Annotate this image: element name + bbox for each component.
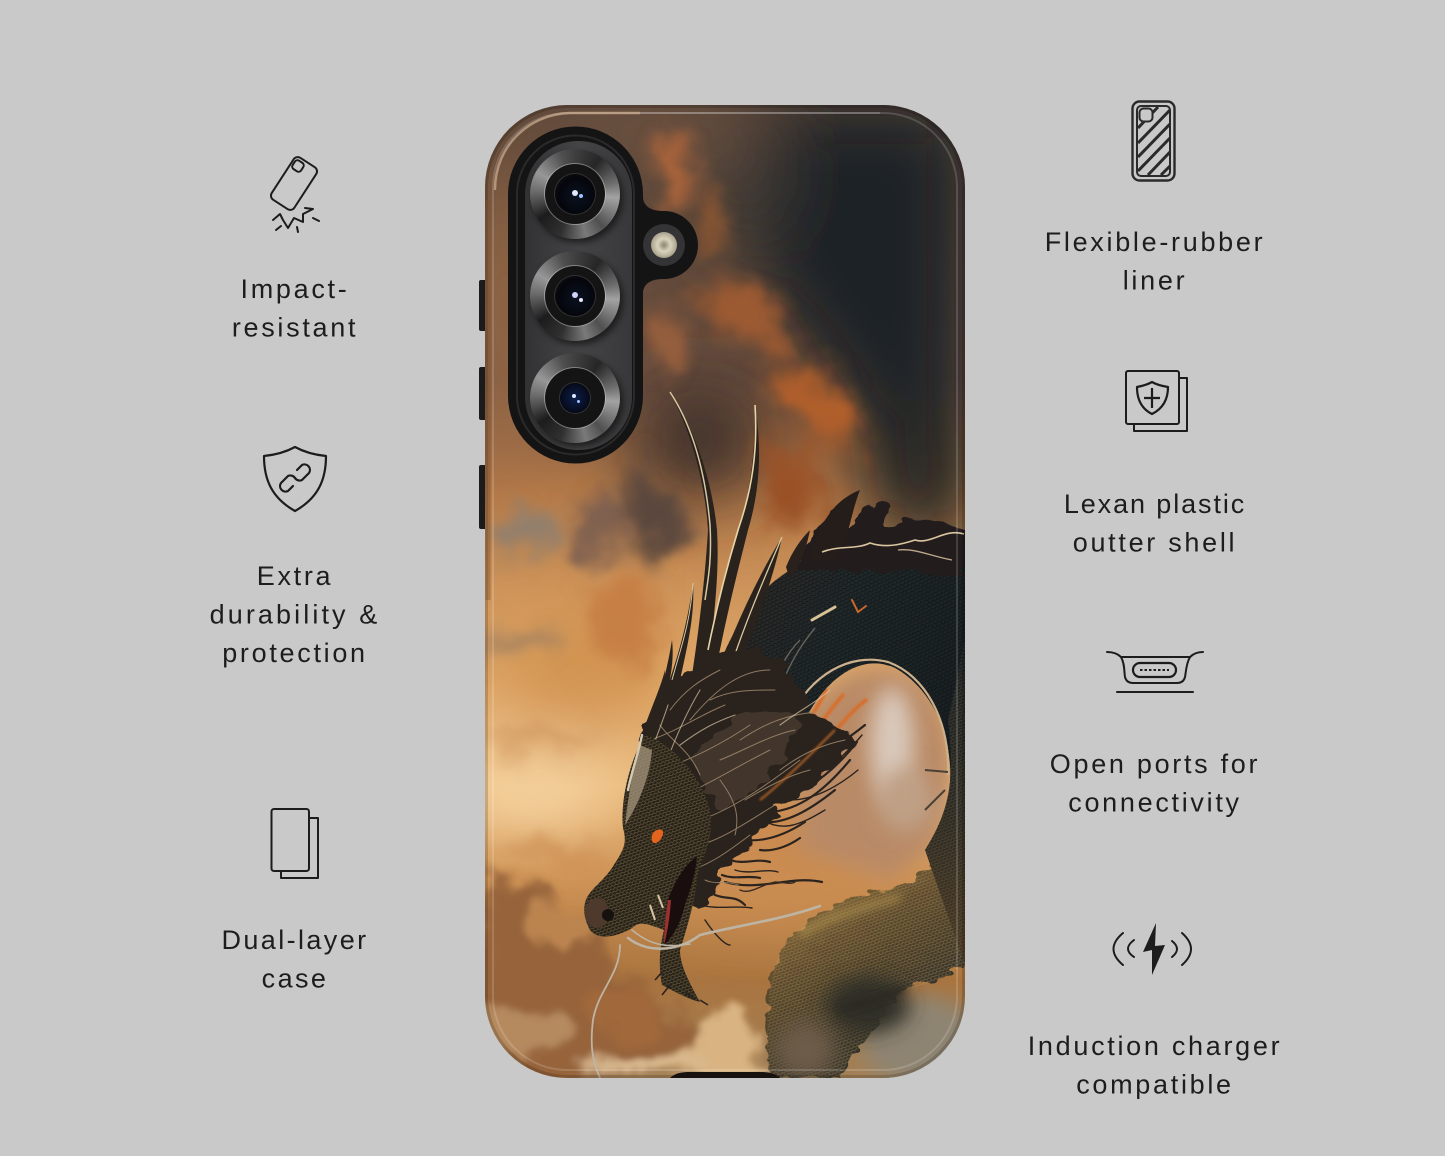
label: open ports: connectivity — [1068, 788, 1242, 818]
label: extra durability: protection — [222, 638, 368, 668]
bottom port notch — [670, 1072, 780, 1078]
label: extra durability: durability & — [210, 600, 380, 630]
icon: phone hitting ground with crack — [269, 155, 319, 232]
panel: phone case with dragon artwork — [479, 105, 965, 1078]
label: lexan plastic shell: Lexan plastic — [1064, 489, 1246, 519]
sky clouds — [485, 105, 965, 1078]
icon: USB-C port — [1107, 652, 1203, 692]
icon: two stacked layers — [272, 809, 318, 878]
label: extra durability: Extra — [257, 561, 333, 591]
feature: extra durability — [210, 447, 380, 668]
dragon: head — [584, 735, 711, 1005]
feature: flexible-rubber liner — [1045, 102, 1265, 296]
icon: wireless charging bolt — [1114, 923, 1191, 975]
label: dual-layer case: case — [262, 964, 328, 994]
label: impact-resistant: resistant — [232, 312, 358, 342]
icon: hatched phone liner — [1132, 102, 1174, 180]
label: lexan plastic shell: outter shell — [1073, 528, 1237, 558]
camera lens: bottom — [530, 353, 620, 443]
icon: shield with chain link — [264, 447, 326, 511]
icon: layered square with shield — [1126, 371, 1187, 431]
feature: lexan plastic shell — [1064, 371, 1246, 558]
dragon: mane — [625, 648, 865, 945]
label: open ports: Open ports for — [1050, 749, 1260, 779]
label: induction charging: Induction charger — [1028, 1031, 1282, 1061]
feature: open ports — [1050, 652, 1260, 818]
camera lens: top — [530, 149, 620, 239]
dragon: whiskers — [592, 882, 820, 1078]
dragon: neck and back — [724, 530, 965, 811]
dragon: arch interior cloud — [792, 669, 952, 880]
label: impact-resistant: Impact- — [241, 274, 349, 304]
label: induction charging: compatible — [1076, 1070, 1234, 1100]
label: flexible-rubber liner: liner — [1123, 266, 1187, 296]
dragon: lower body — [767, 640, 980, 1085]
side buttons — [479, 280, 487, 529]
feature: induction charging — [1028, 923, 1282, 1100]
dragon: back spikes — [786, 490, 965, 580]
feature: dual-layer case — [221, 809, 369, 994]
label: dual-layer case: Dual-layer — [221, 925, 369, 955]
feature: impact-resistant — [232, 155, 358, 342]
dragon: horns — [646, 392, 782, 722]
camera housing — [508, 126, 698, 463]
camera lens: middle — [530, 251, 620, 341]
case edge highlights — [486, 106, 964, 1076]
case artwork — [485, 105, 965, 1078]
label: flexible-rubber liner: Flexible-rubber — [1045, 227, 1265, 257]
